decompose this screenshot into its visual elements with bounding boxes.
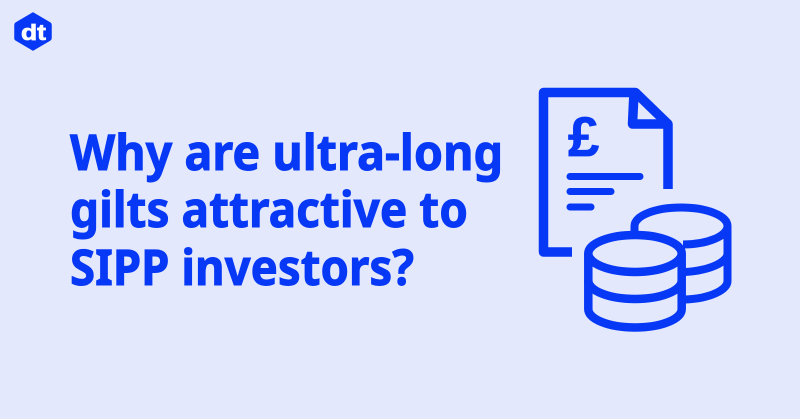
icon: document outline — [544, 92, 668, 252]
icon: pound sign: £ — [568, 105, 599, 168]
title: SIPP investors? — [70, 234, 414, 300]
title: Why are ultra-long — [70, 119, 503, 185]
icon: document with pound sign and coins — [544, 92, 728, 328]
icon: dt logo — [15, 13, 51, 50]
icon: dt logo: dt — [21, 20, 47, 45]
icon: front coin stack — [588, 235, 682, 328]
title — [70, 119, 503, 300]
text lines on document — [570, 176, 640, 207]
title: gilts attractive to — [70, 176, 468, 242]
icon: back coin stack — [634, 208, 728, 300]
